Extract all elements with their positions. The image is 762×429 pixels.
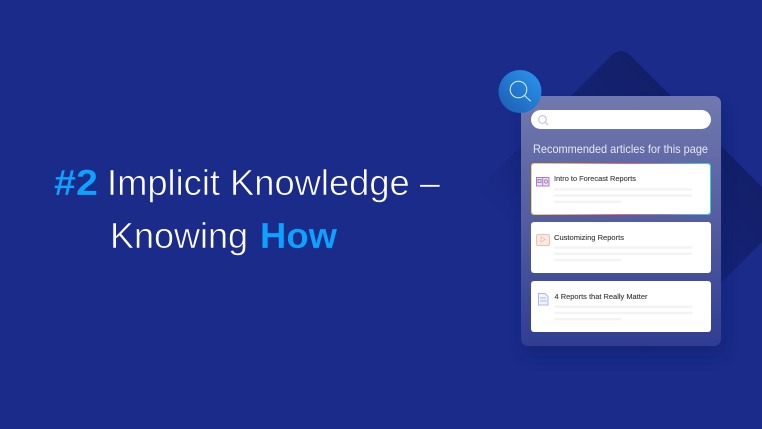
icon: video player [536, 234, 550, 246]
icon: search badge [498, 70, 542, 113]
placeholder lines [554, 306, 692, 320]
panel background [521, 96, 721, 346]
icon: open book [536, 178, 549, 186]
title line 1: Implicit Knowledge – [107, 162, 440, 203]
search bar [531, 110, 711, 129]
title number: #2 [54, 162, 98, 203]
card: 4 Reports that Really Matter [531, 281, 711, 332]
panel heading: Recommended articles for this page [533, 143, 708, 156]
icon: document [538, 294, 548, 305]
panel shadow [524, 106, 724, 356]
card: Customizing Reports [531, 222, 711, 273]
title [54, 162, 440, 256]
card title: Intro to Forecast Reports [554, 174, 636, 183]
decorative dark diamond [458, 51, 762, 378]
card title: Customizing Reports [554, 233, 624, 242]
placeholder lines [554, 188, 692, 203]
card: Intro to Forecast Reports [531, 163, 711, 215]
icon: small magnifier [539, 116, 548, 125]
placeholder lines [554, 246, 692, 261]
panel: recommended articles [521, 96, 721, 346]
title highlight: How [260, 215, 338, 256]
title line 2: Knowing [110, 215, 248, 256]
card title: 4 Reports that Really Matter [554, 292, 648, 301]
